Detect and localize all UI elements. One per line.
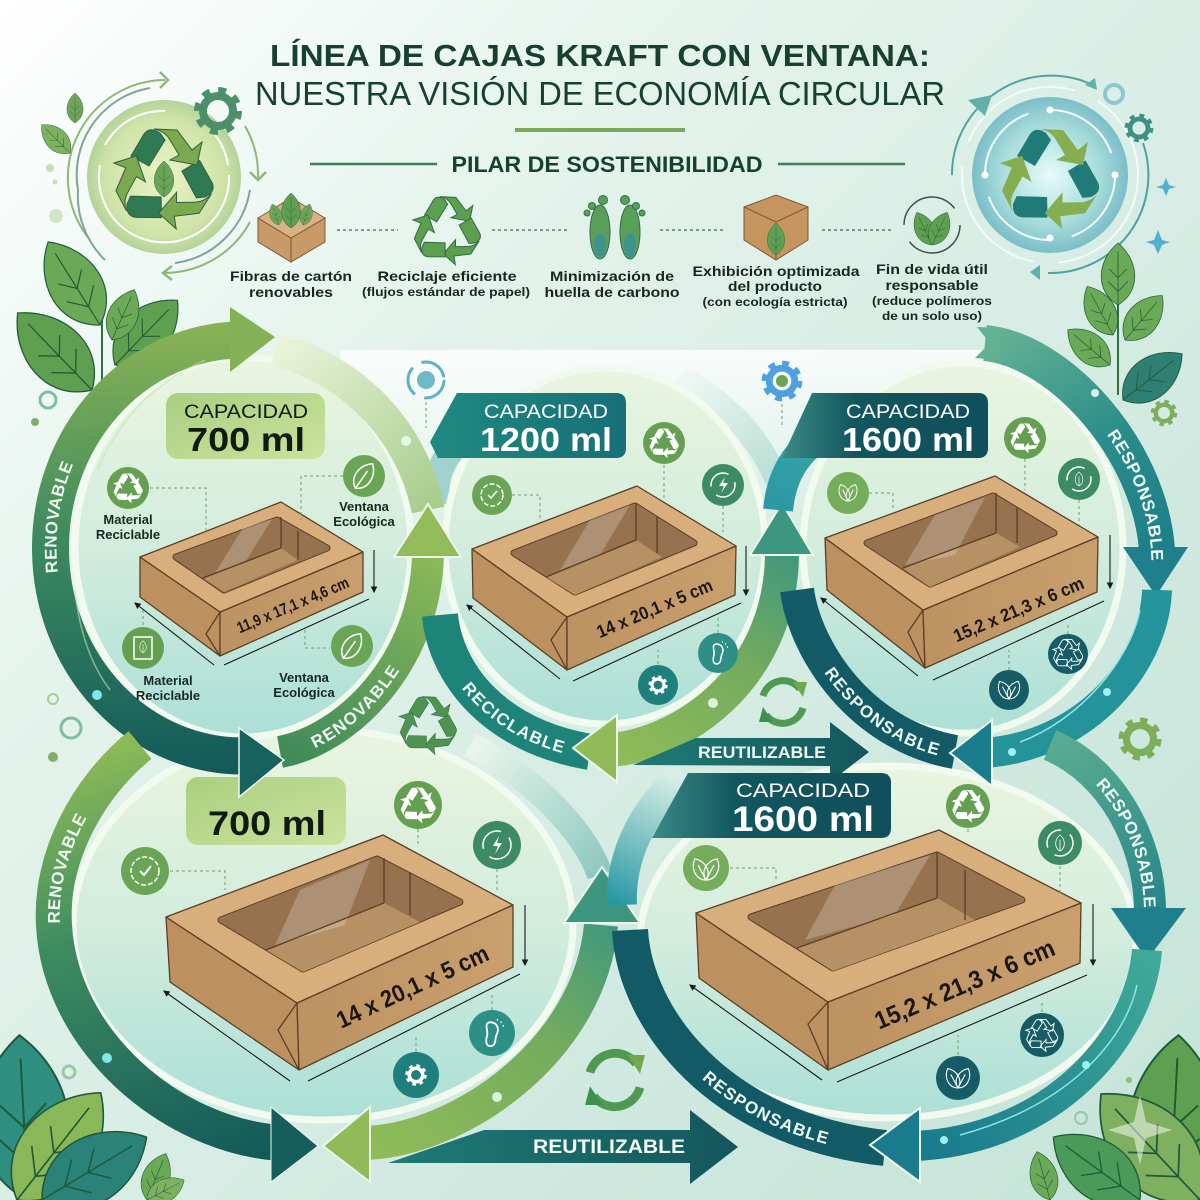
sparkles: [92, 389, 1111, 1144]
box 4: 14 x 20,1 x 5 cm: [332, 940, 493, 1034]
arrow: reutilizable upper: REUTILIZABLE: [698, 743, 826, 762]
box 1: 11,9 x 17,1 x 4,6 cm: [235, 575, 352, 637]
badge: capacidad 700 ml: [166, 393, 325, 459]
callouts: cycle 1: [96, 455, 395, 703]
pillar labels: de un solo uso): [882, 309, 982, 323]
box 2: 14 x 20,1 x 5 cm: [594, 575, 716, 642]
plant: bottom left: [0, 1033, 189, 1200]
badge: capacidad 1600 ml lower: [652, 773, 891, 839]
plant: bottom right: [1024, 1033, 1200, 1200]
arrow head: cycle 1 dark: [239, 728, 284, 797]
callouts: cycle 2: [472, 422, 744, 705]
emblem: right recycle globe: [952, 76, 1176, 280]
emblem: left recycle globe: [34, 72, 266, 280]
callouts: cycle 4: [121, 781, 521, 1098]
callouts: cycle 1: Ecológica: [273, 685, 335, 700]
arrows: cycle 4: [54, 745, 640, 1182]
ring labels: [44, 428, 1164, 1144]
title: NUESTRA VISIÓN DE ECONOMÍA CIRCULAR: [255, 75, 945, 112]
badge: capacidad 1200 ml: CAPACIDAD: [484, 402, 608, 423]
arrows: cycle 5: [622, 745, 1186, 1182]
badge: capacidad 1200 ml: 1200 ml: [480, 421, 612, 458]
badge: 700 ml: 700 ml: [208, 805, 326, 843]
callouts: cycle 1: Material: [103, 512, 153, 527]
pillar labels: Fin de vida útil: [876, 261, 988, 277]
plant: top left: [0, 228, 195, 410]
pillar labels: (reduce polímeros: [872, 294, 992, 308]
box 1: [135, 502, 374, 665]
pillar labels: responsable: [886, 277, 979, 293]
callouts: cycle 1: Material: [143, 673, 193, 688]
badge: capacidad 700 ml: CAPACIDAD: [184, 402, 308, 423]
arrows: cycle 1: [50, 307, 461, 756]
plant: top right: [1058, 243, 1195, 416]
icon: product box: [744, 195, 808, 260]
heading: pilar de sostenibilidad: PILAR DE SOSTENIBILIDAD: [452, 152, 762, 177]
icon: end of life leaf: [904, 197, 960, 253]
disc: bottom left: [73, 730, 573, 1120]
icon: top gear blue: [764, 363, 800, 428]
disc: top left: [75, 357, 411, 737]
arrows: cycle 2: [440, 503, 813, 782]
pillar labels: del producto: [728, 278, 822, 294]
pillar labels: (flujos estándar de papel): [362, 285, 530, 299]
icon: box with leaves: [258, 193, 325, 262]
ring labels: RESPONSABLE: [1107, 428, 1164, 560]
pillar labels: [230, 261, 992, 323]
box 3: 15,2 x 21,3 x 6 cm: [950, 573, 1087, 646]
box 2: [467, 486, 746, 681]
arrow: reutilizable lower: [388, 1110, 738, 1184]
ring labels: RESPONSABLE: [702, 1070, 829, 1144]
ring labels: RENOVABLE: [44, 460, 73, 572]
icon: footprints: [584, 196, 645, 259]
ring labels: RENOVABLE: [48, 813, 86, 922]
decorations: dots and gears: [31, 392, 1176, 1124]
icon: sync lower: [585, 1053, 645, 1107]
pillar labels: (con ecología estricta): [702, 295, 848, 309]
disc: bottom right: [640, 766, 1136, 1118]
box 3: [821, 476, 1110, 680]
arrow: reutilizable upper: [633, 722, 869, 782]
pillar labels: Reciclaje eficiente: [378, 268, 517, 284]
callouts: cycle 1: Ventana: [339, 499, 390, 514]
callouts: cycle 1: Ecológica: [333, 514, 395, 529]
arrow: reutilizable lower: REUTILIZABLE: [533, 1137, 685, 1158]
box 5: [690, 830, 1093, 1082]
badge: capacidad 1200 ml: [430, 393, 626, 458]
pillar labels: Fibras de cartón: [230, 268, 352, 284]
callouts: cycle 5: [683, 784, 1082, 1100]
central light band: [340, 350, 1010, 520]
badge: capacidad 700 ml: 700 ml: [187, 421, 305, 458]
pillar labels: Exhibición optimizada: [692, 263, 860, 279]
title: LÍNEA DE CAJAS KRAFT CON VENTANA:: [270, 38, 930, 73]
icon: center recycle: [392, 697, 462, 758]
disc: top middle: [445, 368, 765, 724]
callouts: cycle 1: Reciclable: [136, 688, 200, 703]
title: [255, 38, 945, 132]
ring labels: RECICLABLE: [462, 682, 565, 753]
icon: sync upper: [759, 681, 807, 723]
callouts: cycle 3: [827, 417, 1100, 710]
badge: 700 ml: [186, 777, 346, 845]
badge: capacidad 1600 ml lower: 1600 ml: [732, 800, 874, 839]
box 4: [164, 835, 525, 1081]
callouts: cycle 1: Ventana: [279, 670, 330, 685]
badge: capacidad 1600 ml: 1600 ml: [842, 421, 974, 458]
pillar labels: Minimización de: [550, 268, 674, 284]
ring labels: RESPONSABLE: [1096, 778, 1156, 908]
arrows: cycle 3: [778, 327, 1188, 786]
pillar labels: renovables: [249, 284, 333, 300]
pillar labels: huella de carbono: [544, 284, 680, 300]
callouts: cycle 1: Reciclable: [96, 527, 160, 542]
pale bands behind discs: [436, 375, 777, 875]
box 5: 15,2 x 21,3 x 6 cm: [871, 934, 1059, 1035]
ring labels: RENOVABLE: [310, 664, 400, 748]
icon: top sync ball: [408, 362, 444, 428]
ring labels: RESPONSABLE: [824, 666, 940, 756]
badge: capacidad 1600 ml: [782, 393, 988, 458]
connector dots: [337, 229, 893, 231]
disc: top right: [803, 363, 1123, 733]
badge: capacidad 1600 ml lower: CAPACIDAD: [736, 781, 870, 802]
badge: capacidad 1600 ml: CAPACIDAD: [846, 402, 970, 423]
icon: recycle: [405, 197, 487, 269]
